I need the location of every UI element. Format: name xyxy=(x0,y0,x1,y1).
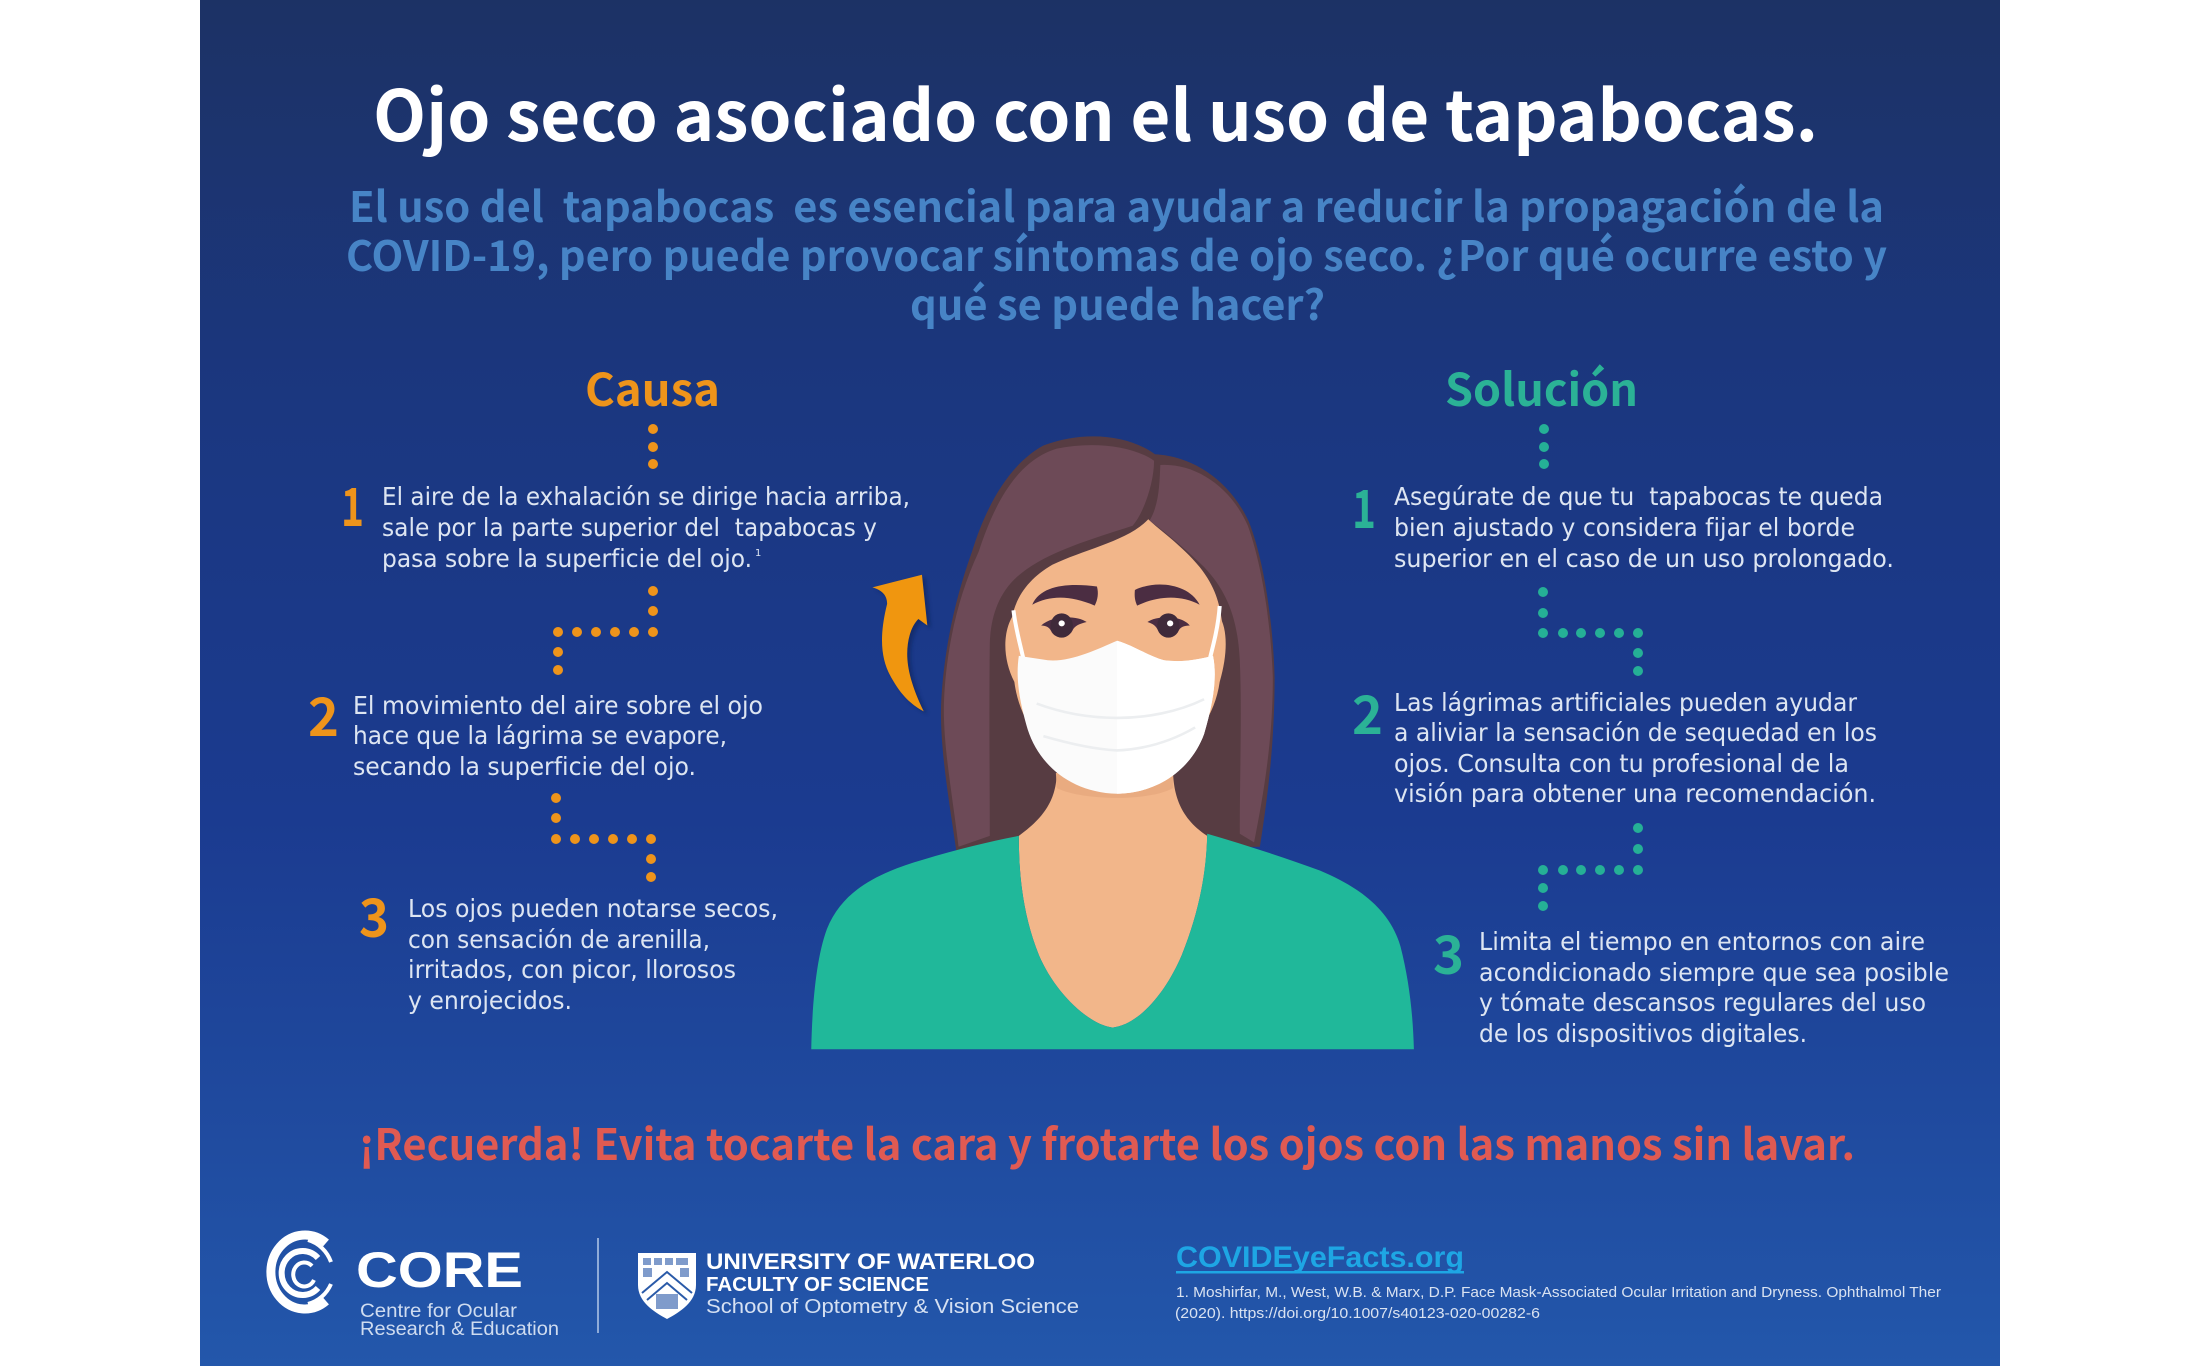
dotted connector: solucion step 1 to 2 xyxy=(1538,587,1643,676)
top: teal shirt xyxy=(811,834,1414,1049)
cause step 2: El movimiento del aire sobre el ojo xyxy=(353,691,763,720)
eye left xyxy=(1041,613,1087,638)
illustration: woman wearing a mask xyxy=(811,436,1414,1049)
arrow shadow xyxy=(876,577,931,714)
solution step 3: Limita el tiempo en entornos con aire xyxy=(1479,927,1925,956)
cause step 1: sale por la parte superior del tapabocas y xyxy=(382,513,877,542)
solution step 3: de los dispositivos digitales. xyxy=(1479,1019,1807,1048)
solution step 3 xyxy=(1433,914,1949,1048)
solution step 1: 1 xyxy=(1352,468,1376,544)
subtitle: qué se puede hacer? xyxy=(910,272,1325,333)
eyebrow left xyxy=(1032,585,1098,606)
mask xyxy=(1018,641,1215,794)
CORE wordmark: CORE xyxy=(356,1242,523,1298)
subtitle: El uso del tapabocas es esencial para ayudar a reducir la propagación de la xyxy=(349,174,1884,235)
solution step 2: a aliviar la sensación de sequedad en los xyxy=(1394,718,1877,747)
text: University of Waterloo xyxy=(706,1249,1079,1318)
arrow body xyxy=(872,575,927,711)
cause step 3: 3 xyxy=(359,877,389,953)
cause step 2: 2 xyxy=(308,676,339,752)
dotted connector: causa step 1 to 2 xyxy=(553,586,658,675)
cause step 3: con sensación de arenilla, xyxy=(408,925,710,954)
solution step 3: acondicionado siempre que sea posible xyxy=(1479,958,1949,987)
subtitle xyxy=(346,174,1887,333)
neck shadow xyxy=(1056,773,1173,798)
title: Ojo seco asociado con el uso de tapabocas. xyxy=(373,61,1818,162)
cause step 2: secando la superficie del ojo. xyxy=(353,752,696,781)
solution step 1: Asegúrate de que tu tapabocas te queda xyxy=(1394,482,1883,511)
solution step 2: 2 xyxy=(1352,674,1383,750)
solution step 2: visión para obtener una recomendación. xyxy=(1394,779,1876,808)
CORE tagline: Centre for Ocular xyxy=(360,1301,518,1322)
mask pleats xyxy=(1037,699,1204,750)
heading: Causa: Causa xyxy=(585,354,720,419)
cause step 3: Los ojos pueden notarse secos, xyxy=(408,894,778,923)
cause step 2 xyxy=(308,676,763,781)
cause step 1: pasa sobre la superficie del ojo. xyxy=(382,544,752,573)
text: University of Waterloo: School of Optometry & Vision Science xyxy=(706,1296,1079,1318)
solution step 2: Las lágrimas artificiales pueden ayudar xyxy=(1394,688,1858,717)
subtitle: COVID-19, pero puede provocar síntomas de ojo seco. ¿Por qué ocurre esto y xyxy=(346,223,1887,284)
solution step 2: ojos. Consulta con tu profesional de la xyxy=(1394,749,1849,778)
text: University of Waterloo: FACULTY OF SCIENCE xyxy=(706,1274,929,1296)
hair right lock xyxy=(1150,465,1273,842)
cause step 1 xyxy=(341,466,910,573)
mask right half xyxy=(1117,641,1215,794)
dotted connector: causa heading to step 1 xyxy=(648,424,658,469)
dotted connector: solucion step 2 to 3 xyxy=(1538,823,1643,911)
reference citation xyxy=(1175,1284,1941,1322)
solution step 1 xyxy=(1352,468,1894,573)
heading: Solución: Solución xyxy=(1445,354,1638,419)
logo: University of Waterloo shield xyxy=(638,1253,696,1319)
cause step 1: 1 xyxy=(341,466,364,542)
cause step 2: hace que la lágrima se evapore, xyxy=(353,721,727,750)
logo: CORE xyxy=(271,1235,559,1340)
solution step 1: superior en el caso de un uso prolongado. xyxy=(1394,544,1894,573)
cause step 3: y enrojecidos. xyxy=(408,986,572,1015)
cause step 1: El aire de la exhalación se dirige hacia arriba, xyxy=(382,482,910,511)
reminder message: ¡Recuerda! Evita tocarte la cara y frotarte los ojos con las manos sin lavar. xyxy=(359,1111,1855,1173)
solution step 3: 3 xyxy=(1433,914,1464,990)
solution step 1: bien ajustado y considera fijar el borde xyxy=(1394,513,1855,542)
face xyxy=(1005,519,1226,777)
hair front xyxy=(944,445,1154,847)
cause step 3: irritados, con picor, llorosos xyxy=(408,955,736,984)
eyebrow right xyxy=(1135,585,1200,606)
mask straps xyxy=(1013,606,1220,665)
icon: CORE rings xyxy=(271,1235,331,1309)
dotted connector: causa step 2 to 3 xyxy=(551,793,656,882)
solution step 3: y tómate descansos regulares del uso xyxy=(1479,988,1926,1017)
neck xyxy=(1019,764,1207,1028)
solution step 2 xyxy=(1352,674,1877,808)
cause step 1: 1 xyxy=(755,548,761,559)
cause step 3 xyxy=(359,877,778,1015)
logo: CORE: Research & Education xyxy=(360,1319,559,1340)
reference citation: 1. Moshirfar, M., West, W.B. & Marx, D.P. Face Mask-Associated Ocular Irritation and Dryness. Ophthalmol Ther xyxy=(1176,1284,1941,1301)
eye right xyxy=(1147,613,1190,638)
hair back xyxy=(941,436,1275,851)
reference citation: (2020). https://doi.org/10.1007/s40123-020-00282-6 xyxy=(1175,1305,1540,1322)
link: COVIDEyeFacts.org: COVIDEyeFacts.org xyxy=(1176,1241,1464,1274)
text: University of Waterloo: UNIVERSITY OF WATERLOO xyxy=(706,1249,1035,1274)
dotted connector: solucion heading to step 1 xyxy=(1539,424,1549,469)
arrow: airflow upward xyxy=(872,575,931,714)
